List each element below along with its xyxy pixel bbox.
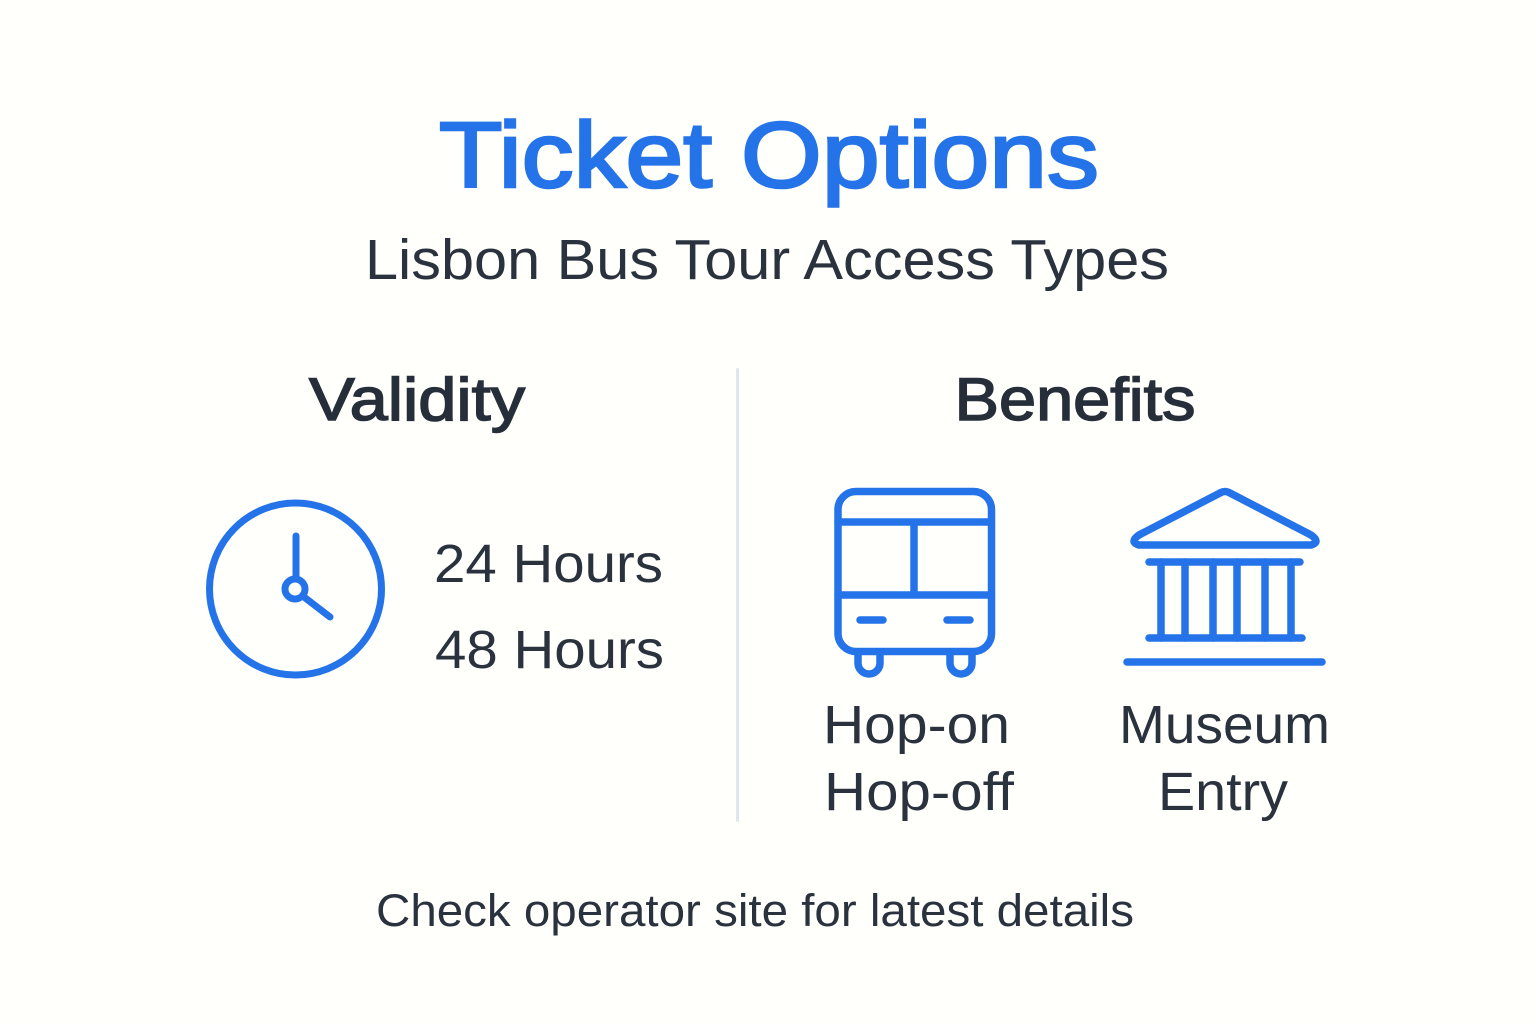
divider [736, 368, 739, 822]
panel: validity [210, 366, 664, 680]
icon: clock [210, 503, 382, 675]
heading: benefits: Benefits [954, 366, 1196, 433]
subtitle: Lisbon Bus Tour Access Types [365, 228, 1169, 292]
heading: validity: Validity [309, 366, 525, 433]
label: museum entry: Museum [1119, 695, 1330, 755]
label: hop-on hop-off: Hop-on [823, 695, 1010, 755]
label: museum entry: Entry [1158, 762, 1288, 822]
label: hop-on hop-off: Hop-off [824, 762, 1015, 822]
option: 24 hours: 24 Hours [434, 534, 663, 594]
icon: bus [838, 492, 992, 674]
title: Ticket Options [439, 103, 1099, 207]
icon: museum [1127, 492, 1322, 662]
footer note: Check operator site for latest details [376, 885, 1134, 936]
option: 48 hours: 48 Hours [435, 620, 664, 680]
panel: benefits [823, 366, 1345, 822]
